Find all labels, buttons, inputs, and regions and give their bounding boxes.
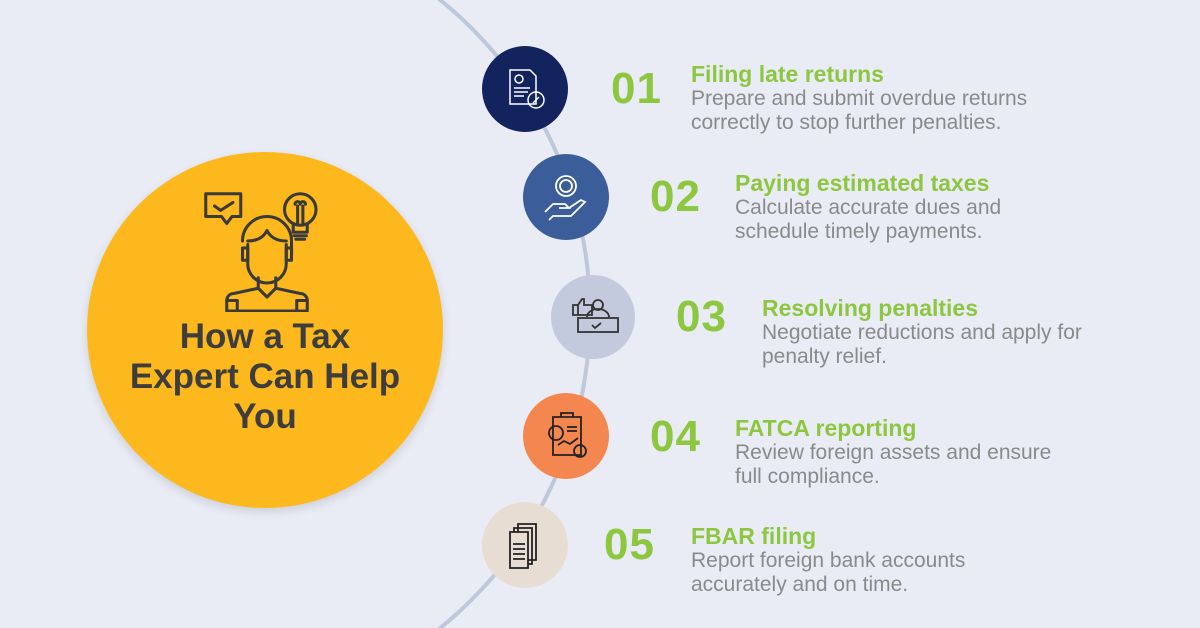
text: FATCA reporting	[735, 415, 916, 441]
icon circle 1	[482, 46, 568, 132]
icon: person with ideas	[204, 192, 318, 312]
icon circle 4	[523, 393, 609, 479]
step 01: 01	[611, 64, 662, 113]
title	[130, 317, 400, 436]
text: Negotiate reductions and apply for	[762, 321, 1082, 344]
text: Prepare and submit overdue returns	[691, 87, 1027, 110]
text: correctly to stop further penalties.	[691, 111, 1001, 134]
step 05: 05	[604, 520, 655, 569]
main circle	[87, 152, 443, 508]
title: You	[233, 397, 297, 436]
step 03: 03	[676, 292, 727, 341]
text: penalty relief.	[762, 345, 887, 368]
step 04: 04	[650, 412, 701, 461]
step 02: 02	[650, 172, 701, 221]
icon circle 2	[523, 154, 609, 240]
text: Filing late returns	[691, 61, 884, 87]
text: schedule timely payments.	[735, 220, 982, 243]
title: Expert Can Help	[130, 357, 400, 396]
icon circle 3	[551, 275, 635, 359]
text: Review foreign assets and ensure	[735, 441, 1051, 464]
text: Report foreign bank accounts	[691, 549, 965, 572]
text: Resolving penalties	[762, 295, 978, 321]
text: FBAR filing	[691, 523, 816, 549]
text: accurately and on time.	[691, 573, 908, 596]
text: Paying estimated taxes	[735, 170, 989, 196]
title: How a Tax	[180, 317, 350, 356]
text: full compliance.	[735, 465, 880, 488]
text: Calculate accurate dues and	[735, 196, 1001, 219]
icon circle 5	[482, 502, 568, 588]
